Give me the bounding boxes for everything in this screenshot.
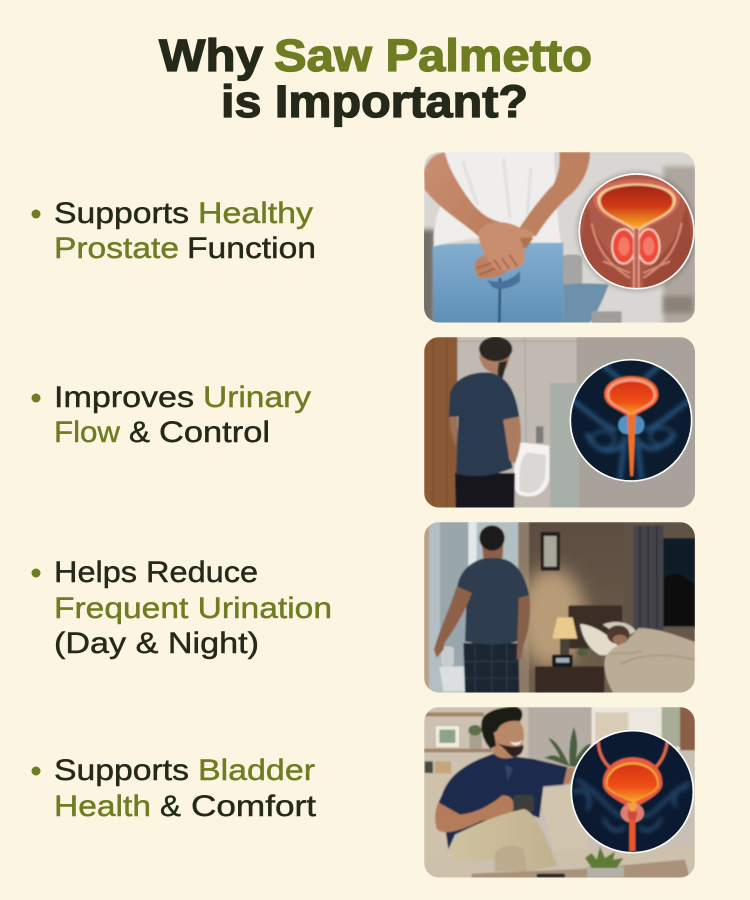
photo panel 2: man at urinal with urinary flow inset	[424, 337, 697, 508]
inset: glowing urinary tract	[570, 360, 692, 481]
benefit 4 text: Bladder	[198, 754, 315, 787]
benefit 4 text: Supports	[54, 754, 189, 787]
benefit 2 text: Urinary	[203, 381, 311, 414]
benefit 1 text: Prostate	[54, 232, 179, 265]
benefit 3 text: (Day & Night)	[54, 627, 259, 660]
benefit 1 text: Function	[187, 232, 316, 265]
benefit 2 text: Control	[159, 416, 270, 449]
benefit 3 text: Frequent Urination	[54, 592, 332, 625]
title	[159, 30, 592, 127]
benefit 4 text: &	[160, 790, 181, 823]
benefit 4 text	[32, 754, 317, 823]
photo panel 3: man walking to toilet at night while partner sleeps	[424, 522, 696, 693]
benefit 1 text: Supports	[54, 197, 189, 230]
benefit 1 text	[32, 197, 316, 265]
benefit 2 text: &	[129, 416, 150, 449]
benefit 1 text: Healthy	[198, 197, 313, 230]
title: Why	[159, 30, 263, 81]
title: is Important?	[221, 76, 528, 127]
benefit 4 text: Health	[54, 790, 151, 823]
title: Saw Palmetto	[274, 30, 592, 81]
benefit 3 text	[32, 556, 332, 660]
benefit 2 text: Flow	[54, 416, 120, 449]
benefit 4 text: Comfort	[191, 790, 317, 823]
benefit 2 text	[32, 381, 311, 449]
benefit 2 text: Improves	[54, 381, 194, 414]
photo panel 1: man holding groin with prostate inset	[420, 152, 697, 325]
benefit 3 text: Helps Reduce	[54, 556, 258, 589]
inset: bladder and urethra	[571, 731, 693, 853]
inset: prostate anatomy	[577, 171, 697, 291]
photo panel 4: relaxed man on sofa with bladder inset	[424, 707, 695, 878]
